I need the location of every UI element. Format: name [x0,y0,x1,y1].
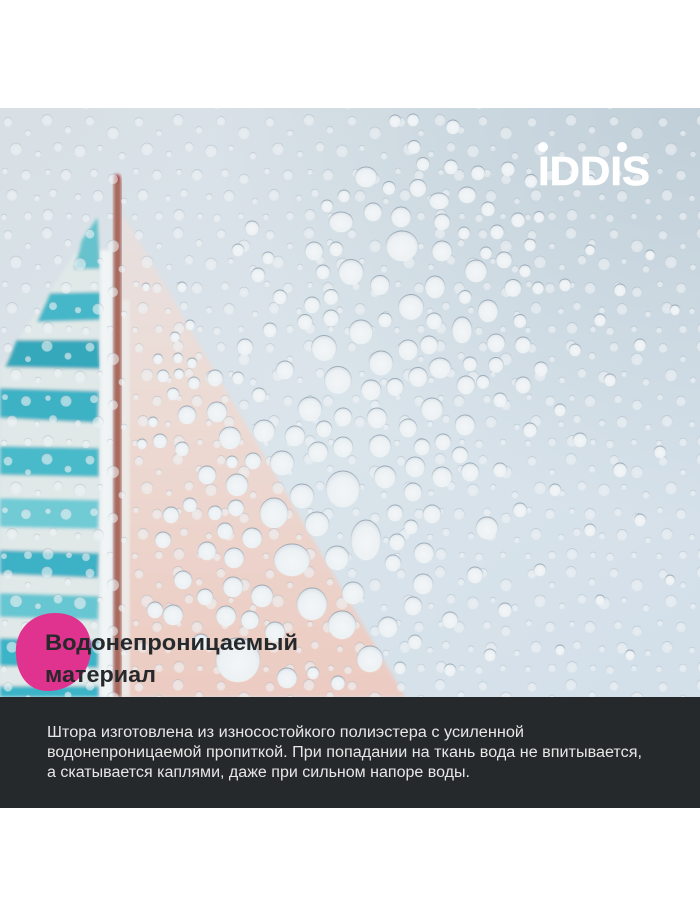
fabric background [0,108,700,697]
heading: Водонепроницаемый [45,630,298,655]
whitish band right of mast [121,300,130,697]
mast [113,174,122,697]
striped sail [0,215,100,697]
dark description panel [0,697,700,808]
heading [45,630,298,687]
large water drops [137,114,680,690]
white band beside mast [100,250,112,697]
description text: а скатывается каплями, даже при сильном напоре воды. [47,764,470,781]
photo: water drops on shower curtain fabric [0,108,700,697]
description text: Штора изготовлена из износостойкого полиэстера с усиленной [47,724,524,741]
pink blob accent [16,613,91,691]
small water drops [0,108,700,697]
logo: IDDIS: IDDIS [538,148,650,194]
description text: водонепроницаемой пропиткой. При попадании на ткань вода не впитывается, [47,744,642,761]
description text [47,724,642,781]
pink sail [122,212,405,697]
heading: материал [45,662,156,687]
